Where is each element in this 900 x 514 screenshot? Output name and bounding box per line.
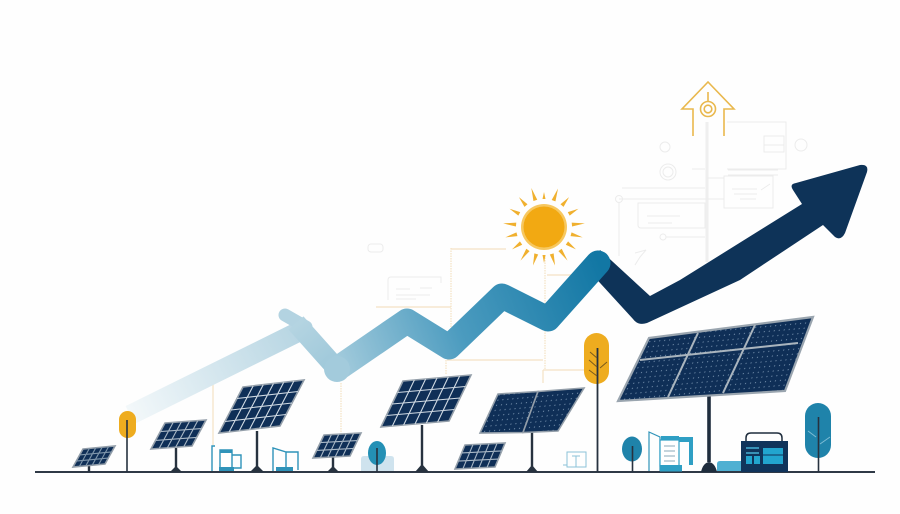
icon: document 2 xyxy=(273,448,298,471)
icon: battery unit xyxy=(717,433,788,472)
tree: small teal with light block xyxy=(361,441,394,472)
arrow: node circle xyxy=(324,356,350,382)
arrow: rising blue segment xyxy=(337,263,598,369)
icon: small outlined box xyxy=(563,452,586,467)
tree: small yellow xyxy=(119,411,136,472)
faint connector lines: centre xyxy=(213,244,584,445)
icon: large document xyxy=(649,432,693,472)
arrow: descending light segment xyxy=(296,323,337,369)
growth arrow xyxy=(130,165,867,415)
solar panel 6 xyxy=(455,443,505,469)
arrow: faded first segment xyxy=(130,331,300,415)
ground line xyxy=(35,471,875,473)
solar panel 5 xyxy=(381,375,471,472)
icon: sun xyxy=(503,187,585,266)
arrow: dark final segment and head xyxy=(590,165,867,324)
solar panel 1 xyxy=(73,446,115,472)
tree: small blue xyxy=(622,436,642,472)
tree: tall yellow xyxy=(584,333,609,472)
solar panel 8 xyxy=(618,317,813,472)
solar panel 3 xyxy=(219,380,304,472)
solar panel 4 xyxy=(313,433,361,472)
tree: tall blue xyxy=(805,403,831,472)
icon: house arrow xyxy=(682,82,734,136)
icon: document 1 xyxy=(212,446,241,471)
arrow: head tip of faded segment xyxy=(285,315,306,327)
faint blueprint lines: top right xyxy=(616,122,807,265)
solar panel 2 xyxy=(151,420,206,472)
solar panel 7 xyxy=(480,388,584,472)
